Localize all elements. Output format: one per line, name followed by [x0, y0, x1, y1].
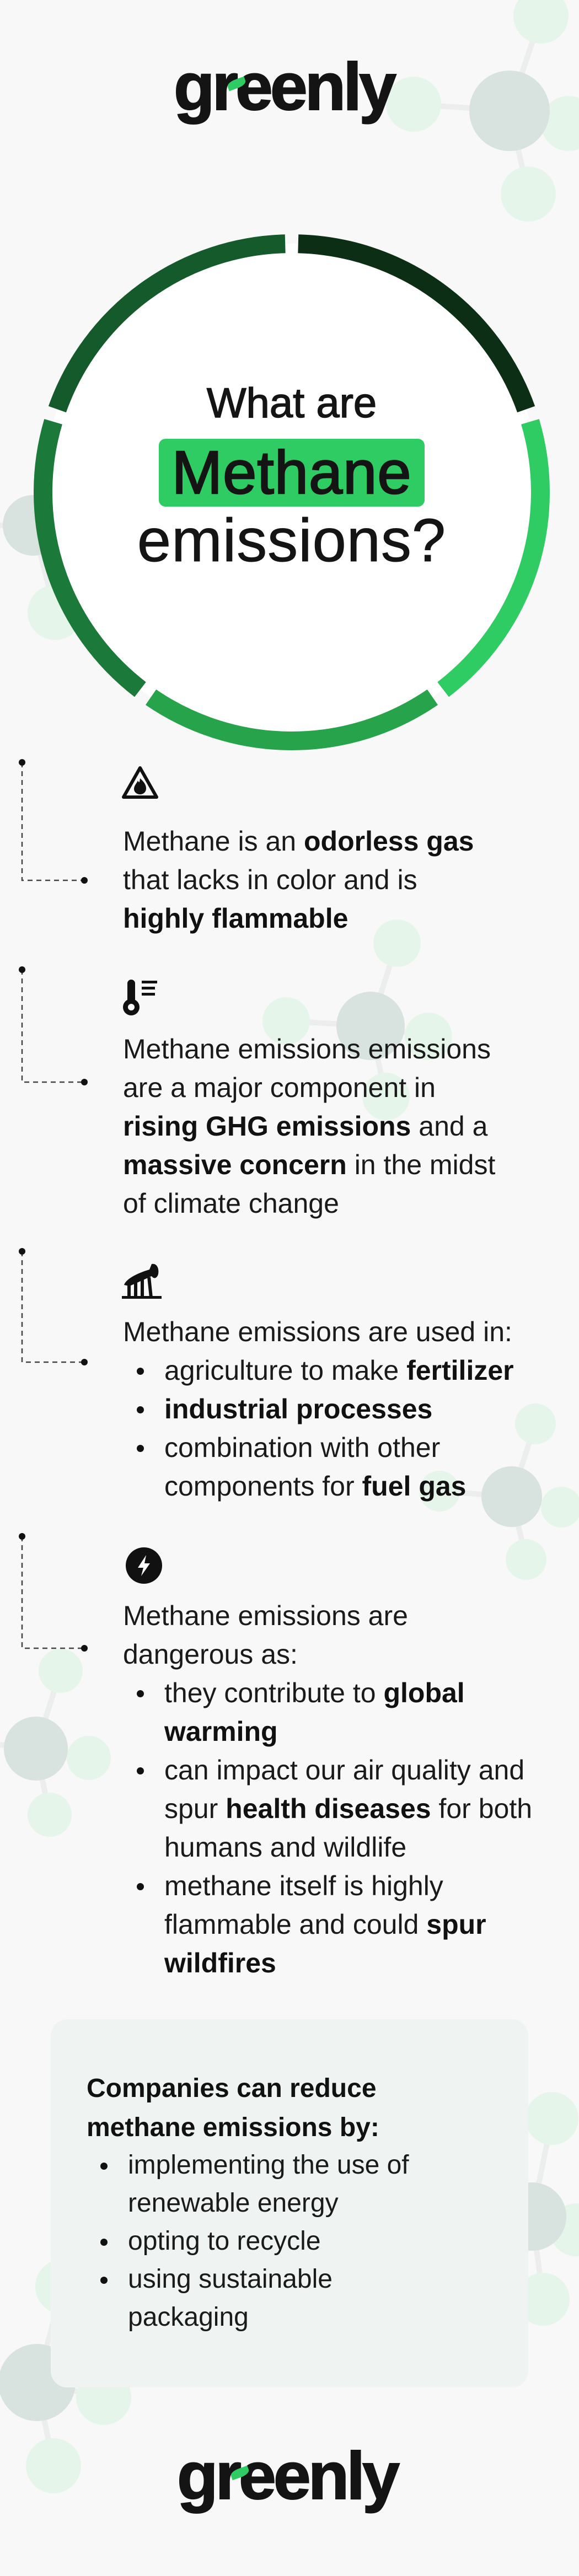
text: item 2: are a major component in	[123, 1072, 436, 1103]
title: emissions?	[137, 507, 446, 574]
text: item 4: wildfires	[164, 1948, 276, 1978]
text: item 4	[123, 1600, 532, 1978]
text: item 4: Methane emissions are	[123, 1600, 408, 1631]
icon: pump jack	[122, 1263, 162, 1299]
panel heading: methane emissions by:	[87, 2113, 379, 2142]
panel heading	[87, 2074, 379, 2142]
text: item 2	[123, 1034, 495, 1219]
text: item 2: rising GHG emissions and a	[123, 1111, 487, 1142]
text: item 1	[123, 826, 474, 934]
text: item 3: industrial processes	[164, 1394, 432, 1424]
text: item 3	[123, 1316, 514, 1502]
logo: bottom: greenly	[177, 2438, 397, 2513]
text: item 1: Methane is an odorless gas	[123, 826, 474, 857]
icon: thermometer	[123, 980, 157, 1015]
text: item 4: can impact our air quality and	[164, 1755, 524, 1786]
text: item 4: dangerous as:	[123, 1639, 298, 1670]
text: item 4: methane itself is highly	[164, 1870, 443, 1901]
text: item 4: they contribute to global	[164, 1677, 465, 1708]
icon: bolt circle	[126, 1547, 162, 1584]
panel list: renewable energy	[128, 2188, 339, 2218]
icon: flammable triangle	[122, 766, 158, 799]
title	[137, 380, 446, 574]
text: item 2: Methane emissions emissions	[123, 1034, 491, 1064]
panel list: implementing the use of	[128, 2150, 409, 2180]
panel list: using sustainable	[128, 2265, 333, 2294]
panel: reduce emissions	[51, 2019, 528, 2387]
title circle	[34, 234, 550, 750]
text: item 3: combination with other	[164, 1432, 440, 1463]
text: item 4: warming	[164, 1716, 278, 1747]
text: item 3: Methane emissions are used in:	[123, 1316, 512, 1347]
text: item 4: spur health diseases for both	[164, 1793, 532, 1824]
panel list: packaging	[128, 2303, 249, 2332]
panel list: opting to recycle	[128, 2227, 321, 2256]
logo: top: greenly	[174, 49, 394, 124]
text: item 1: highly flammable	[123, 903, 348, 934]
text: item 3: components for fuel gas	[164, 1471, 466, 1502]
text: item 1: that lacks in color and is	[123, 864, 417, 895]
panel list	[100, 2150, 409, 2332]
text: item 4: humans and wildlife	[164, 1832, 406, 1863]
text: item 4: flammable and could spur	[164, 1909, 486, 1940]
text: item 3: agriculture to make fertilizer	[164, 1355, 514, 1386]
panel heading: Companies can reduce	[87, 2074, 377, 2103]
title highlight: Methane: Methane	[171, 439, 412, 507]
text: item 2: of climate change	[123, 1188, 339, 1219]
title: What are	[207, 380, 377, 427]
text: item 2: massive concern in the midst	[123, 1149, 495, 1180]
connectors	[19, 759, 88, 1652]
